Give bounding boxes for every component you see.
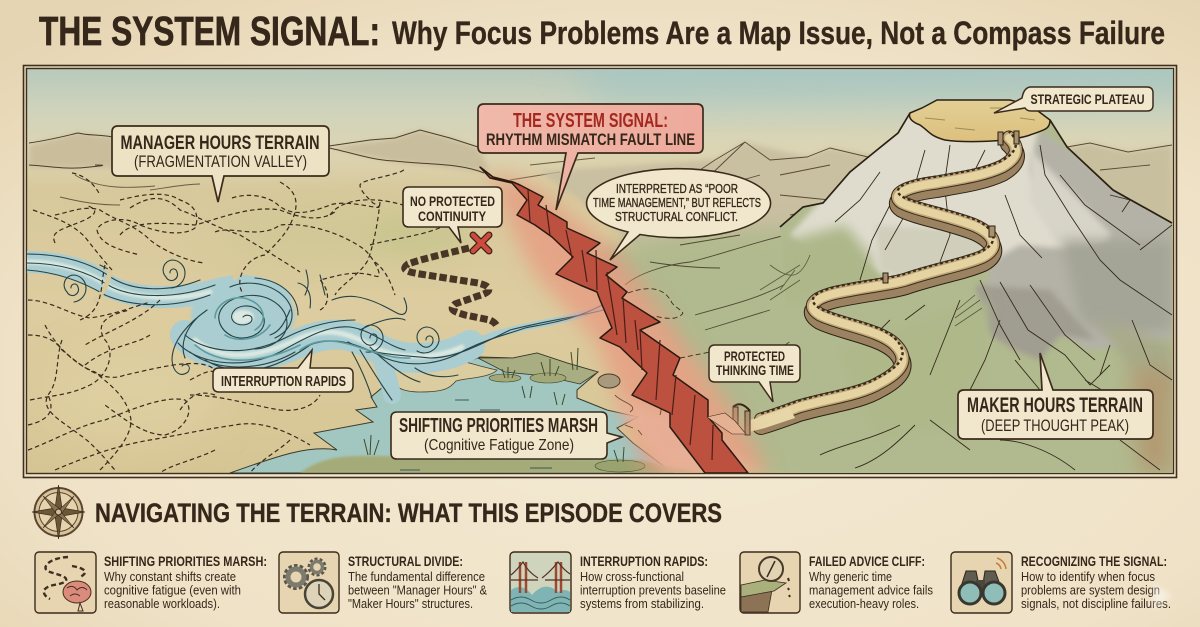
icon: binoculars [951,552,1012,613]
item: Interruption Rapids: interruption prevents baseline [580,582,726,598]
icon: broken bridge over waves [510,552,571,613]
callout: Manager Hours Terrain: MANAGER HOURS TERRAIN [120,133,320,154]
item: Failed Advice Cliff: Why generic time [809,569,892,584]
item: Recognizing the Signal: signals, not discipline failures. [1021,596,1171,611]
callout: interpreted as poor time management: INTERPRETED AS “POOR [616,181,738,196]
callout: interpreted as poor time management: TIME MANAGEMENT,” BUT REFLECTS [593,195,761,210]
item: Interruption Rapids: INTERRUPTION RAPIDS: [580,553,708,569]
panel: terrain map [24,40,1200,490]
item: Failed Advice Cliff: management advice fails [809,582,933,598]
item: Interruption Rapids: How cross-functional [580,569,684,584]
dashed wandering paths [28,168,453,473]
callout: Maker Hours Terrain: (DEEP THOUGHT PEAK) [981,416,1129,435]
plateau [909,100,1050,142]
callout: Protected Thinking Time [709,345,800,402]
callout: interpreted as poor time management [587,169,771,260]
item: Failed Advice Cliff: FAILED ADVICE CLIFF: [809,553,925,569]
green foothills [602,224,800,473]
heading: navigating the terrain: NAVIGATING THE TERRAIN: WHAT THIS EPISODE COVERS [95,498,722,528]
fault line chasm [480,167,748,473]
callout: interpreted as poor time management: STRUCTURAL CONFLICT. [615,209,738,224]
icon: compass falling off cliff [740,552,800,613]
item: Recognizing the Signal: problems are system design [1021,582,1160,598]
far hills right [540,142,1172,250]
callout: The System Signal fault line: THE SYSTEM SIGNAL: [513,110,668,132]
callout: Maker Hours Terrain [958,353,1153,439]
callout: Protected Thinking Time: PROTECTED [724,348,785,364]
item: Interruption Rapids [510,552,726,613]
item: Failed Advice Cliff [740,552,933,613]
icon: gears and clock [279,552,339,613]
title: THE SYSTEM SIGNAL: [39,8,380,54]
callout: The System Signal fault line: RHYTHM MISMATCH FAULT LINE [486,130,695,149]
callout: Shifting Priorities Marsh: (Cognitive Fatigue Zone) [424,437,574,454]
callout: Manager Hours Terrain: (FRAGMENTATION VALLEY) [134,152,307,171]
callout: Protected Thinking Time: THINKING TIME [716,362,794,378]
item: Structural Divide [279,552,487,613]
item: Structural Divide: The fundamental difference [348,569,485,584]
callout: No Protected Continuity [403,187,502,243]
item: Shifting Priorities Marsh: SHIFTING PRIORITIES MARSH: [104,553,267,569]
callout: Interruption Rapids: INTERRUPTION RAPIDS [221,373,346,390]
thick failed path [405,248,497,327]
callout: Shifting Priorities Marsh [391,412,622,459]
title [39,8,1165,54]
callout: Manager Hours Terrain [112,126,329,202]
item: Structural Divide: STRUCTURAL DIVIDE: [348,553,463,569]
river and interruption rapids [27,254,604,400]
mountain: Deep Thought Peak [760,95,1180,475]
icon: brain and dashed path [35,552,96,613]
item: Structural Divide: "Maker Hours" structures. [348,596,473,611]
callout: The System Signal fault line [478,104,703,210]
marsh [230,348,700,473]
item: Recognizing the Signal [951,552,1171,613]
far hills left [29,130,595,205]
item: Shifting Priorities Marsh: reasonable workloads). [104,596,220,611]
item: Recognizing the Signal: How to identify when focus [1021,569,1155,584]
red glow along the fault [488,172,770,473]
item: Interruption Rapids: systems from stabilizing. [580,596,704,611]
callout: Strategic Plateau: STRATEGIC PLATEAU [1030,91,1144,107]
item: Structural Divide: between "Manager Hours" & [348,582,487,598]
icon: compass rose [32,485,85,539]
callout: Strategic Plateau [994,87,1153,113]
item: Failed Advice Cliff: execution-heavy roles. [809,596,919,611]
callout: No Protected Continuity: CONTINUITY [418,208,487,224]
winding path up the mountain [745,132,1016,433]
item: Shifting Priorities Marsh [35,552,267,613]
callout: No Protected Continuity: NO PROTECTED [410,193,495,209]
item: Shifting Priorities Marsh: cognitive fatigue (even with [104,582,241,598]
item: Shifting Priorities Marsh: Why constant shifts create [104,569,236,584]
icon: red X [473,235,489,251]
callout: Interruption Rapids [213,350,353,392]
callout: Shifting Priorities Marsh: SHIFTING PRIORITIES MARSH [399,415,598,437]
gate posts along the path [733,131,1019,435]
